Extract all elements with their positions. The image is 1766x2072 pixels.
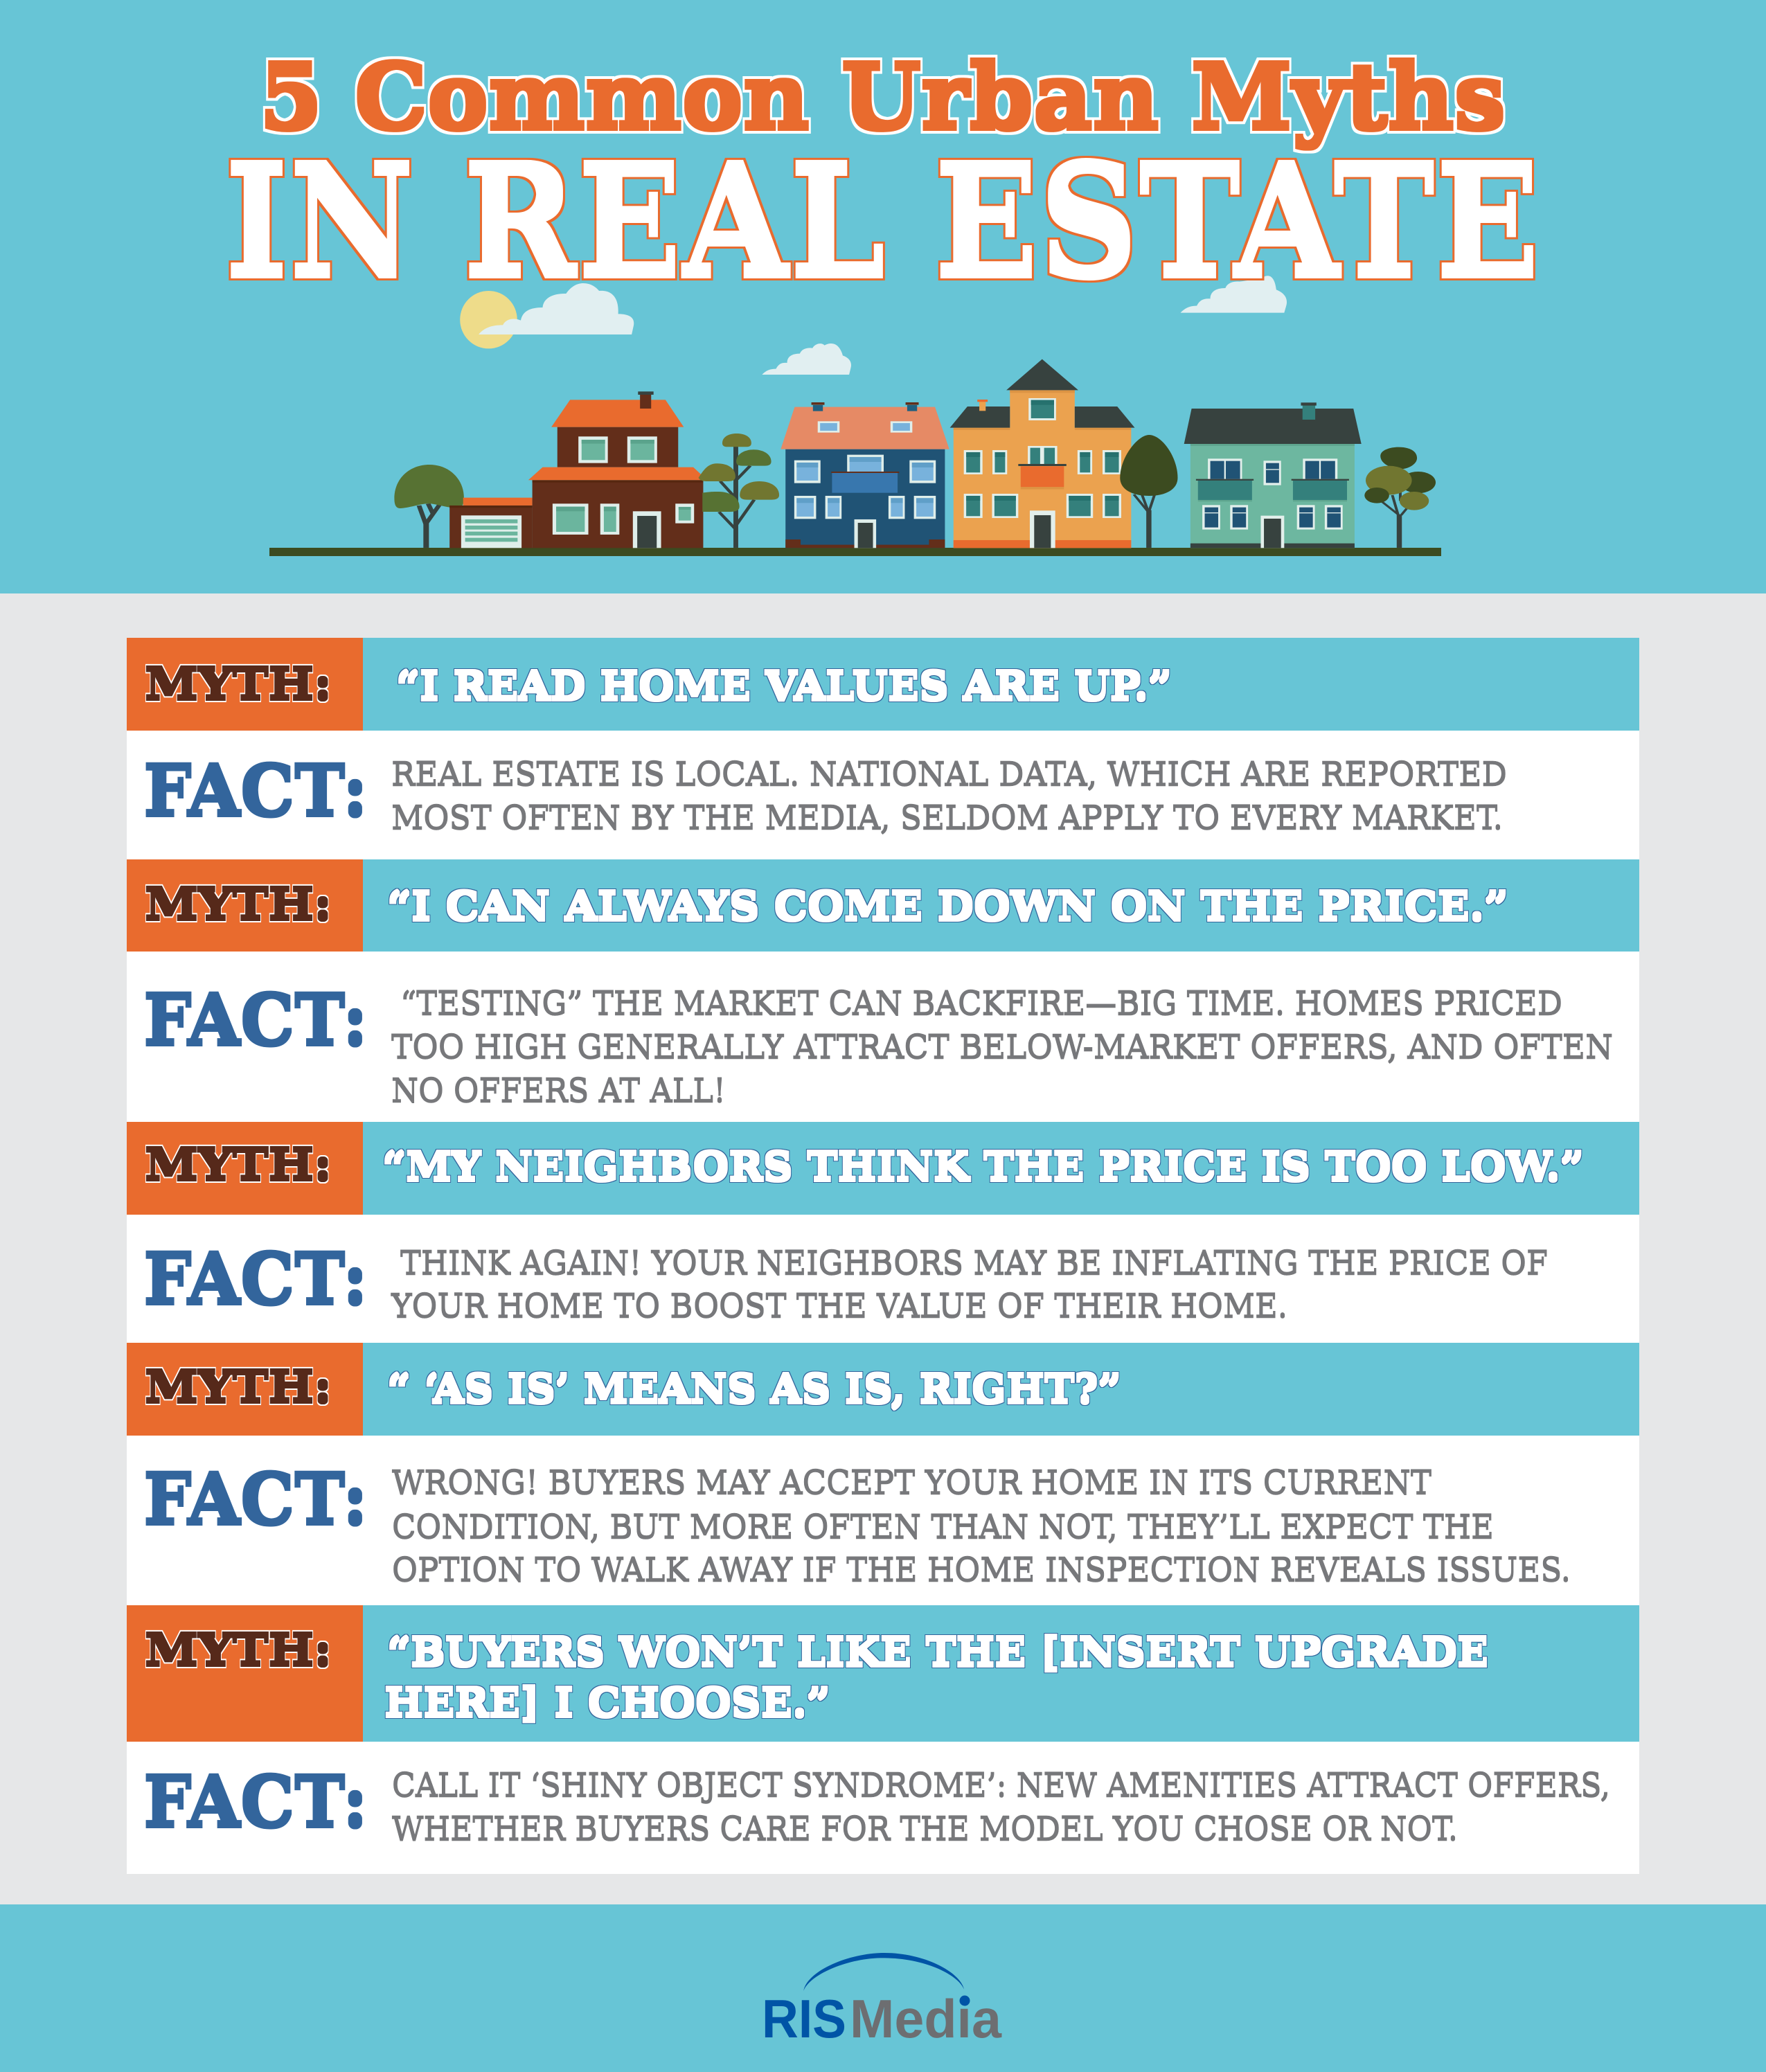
panel: myth 4 <box>127 1343 1639 1436</box>
fact 5 background <box>127 1742 1639 1874</box>
logo word Media: Media <box>850 1988 1002 2049</box>
right scene: orange house, tree, green house, tree <box>950 359 1436 548</box>
icon: sun and clouds <box>460 276 1287 375</box>
panel: fact 5 <box>127 1742 1639 1874</box>
myth 2 bar <box>127 859 1639 952</box>
icon: brown house <box>528 391 707 548</box>
fact 2 text: TOO HIGH GENERALLY ATTRACT BELOW-MARKET OFFERS, AND OFTEN <box>391 1028 1613 1066</box>
fact 5 text <box>392 1767 1610 1848</box>
icon: large cloud <box>479 283 634 334</box>
logo dot <box>960 1996 970 2006</box>
fact 2 text <box>391 985 1613 1110</box>
icon: right cloud <box>1181 276 1287 313</box>
fact 3 text <box>391 1244 1548 1325</box>
icon: sun <box>460 291 517 348</box>
icon: blue house <box>781 402 949 548</box>
logo: RISMedia <box>762 1953 1002 2049</box>
panel: fact 2 <box>127 952 1639 1122</box>
fact 2 background <box>127 952 1639 1122</box>
myth 3 label box <box>127 1122 363 1215</box>
fact 1 background <box>127 731 1639 859</box>
panel: myth 3 <box>127 1122 1639 1215</box>
title line 1: 5 Common Urban Myths <box>259 45 1506 150</box>
myth 5 label box <box>127 1605 363 1742</box>
icon: tree 4 <box>1364 447 1436 548</box>
icon: garage <box>449 498 533 548</box>
ground <box>269 548 1441 556</box>
fact 3 background <box>127 1215 1639 1343</box>
fact 5 text: WHETHER BUYERS CARE FOR THE MODEL YOU CHOSE OR NOT. <box>392 1810 1458 1848</box>
myth 2 label box <box>127 859 363 952</box>
myth 1 label: MYTH: <box>145 659 332 709</box>
panel: myth 5 <box>127 1605 1639 1742</box>
fact 5 label: FACT: <box>143 1761 368 1843</box>
icon: tree 3 <box>1120 435 1177 548</box>
myth 5 quote <box>384 1629 1488 1726</box>
panel: myth 2 <box>127 859 1639 952</box>
myth 4 label: MYTH: <box>145 1361 332 1412</box>
fact 1 label: FACT: <box>143 750 368 832</box>
fact 4 label: FACT: <box>143 1458 368 1540</box>
logo word RIS: RIS <box>762 1988 846 2049</box>
myth 3 label: MYTH: <box>145 1139 332 1190</box>
header background <box>0 0 1766 593</box>
logo arc <box>803 1953 964 1991</box>
footer background <box>0 1904 1766 2072</box>
fact 1 text: REAL ESTATE IS LOCAL. NATIONAL DATA, WHICH ARE REPORTED <box>391 756 1507 794</box>
myth 3 quote: “MY NEIGHBORS THINK THE PRICE IS TOO LOW.” <box>382 1144 1584 1190</box>
left scene: tree, brown house, tree, blue house <box>394 391 949 548</box>
panel: footer <box>0 1904 1766 2072</box>
myth 4 label box <box>127 1343 363 1436</box>
myth 1 label box <box>127 638 363 731</box>
panel: myth 1 <box>127 638 1639 731</box>
panel: fact 4 <box>127 1436 1639 1605</box>
myth 5 label: MYTH: <box>145 1625 332 1675</box>
fact 4 text: CONDITION, BUT MORE OFTEN THAN NOT, THEY’LL EXPECT THE <box>392 1508 1494 1546</box>
title line 2: IN REAL ESTATE <box>224 132 1540 312</box>
panel: fact 1 <box>127 731 1639 859</box>
fact 4 background <box>127 1436 1639 1605</box>
myth 2 label: MYTH: <box>145 879 332 929</box>
fact 2 label: FACT: <box>143 979 368 1061</box>
fact 1 text <box>391 756 1507 837</box>
myth 4 bar <box>127 1343 1639 1436</box>
myth 5 quote: “BUYERS WON’T LIKE THE [INSERT UPGRADE <box>387 1629 1488 1675</box>
myth 5 quote: HERE] I CHOOSE.” <box>384 1680 830 1726</box>
icon: small cloud <box>762 343 851 375</box>
fact 2 text: NO OFFERS AT ALL! <box>391 1072 726 1110</box>
icon: orange house <box>950 359 1135 548</box>
myth 1 bar <box>127 638 1639 731</box>
icon: green house <box>1184 402 1362 548</box>
myth 5 bar <box>127 1605 1639 1742</box>
illustration: neighbourhood <box>269 359 1441 556</box>
fact 3 text: THINK AGAIN! YOUR NEIGHBORS MAY BE INFLATING THE PRICE OF <box>400 1244 1548 1283</box>
panel: fact 3 <box>127 1215 1639 1343</box>
myth 3 bar <box>127 1122 1639 1215</box>
fact 5 text: CALL IT ‘SHINY OBJECT SYNDROME’: NEW AMENITIES ATTRACT OFFERS, <box>392 1767 1610 1805</box>
myth 4 quote: “ ‘AS IS’ MEANS AS IS, RIGHT?” <box>387 1366 1121 1412</box>
icon: tree 2 <box>699 434 779 548</box>
fact 2 text: “TESTING” THE MARKET CAN BACKFIRE—BIG TIME. HOMES PRICED <box>400 985 1562 1023</box>
fact 1 text: MOST OFTEN BY THE MEDIA, SELDOM APPLY TO EVERY MARKET. <box>391 799 1503 837</box>
fact 4 text: WRONG! BUYERS MAY ACCEPT YOUR HOME IN ITS CURRENT <box>392 1464 1431 1502</box>
icon: tree 1 <box>394 465 464 548</box>
fact 4 text <box>392 1464 1571 1589</box>
panel: header <box>0 0 1766 593</box>
myth 1 quote: “I READ HOME VALUES ARE UP.” <box>396 663 1172 709</box>
myth 2 quote: “I CAN ALWAYS COME DOWN ON THE PRICE.” <box>387 884 1508 929</box>
fact 3 text: YOUR HOME TO BOOST THE VALUE OF THEIR HOME. <box>391 1287 1287 1325</box>
fact 4 text: OPTION TO WALK AWAY IF THE HOME INSPECTION REVEALS ISSUES. <box>392 1551 1571 1589</box>
fact 3 label: FACT: <box>143 1238 368 1320</box>
